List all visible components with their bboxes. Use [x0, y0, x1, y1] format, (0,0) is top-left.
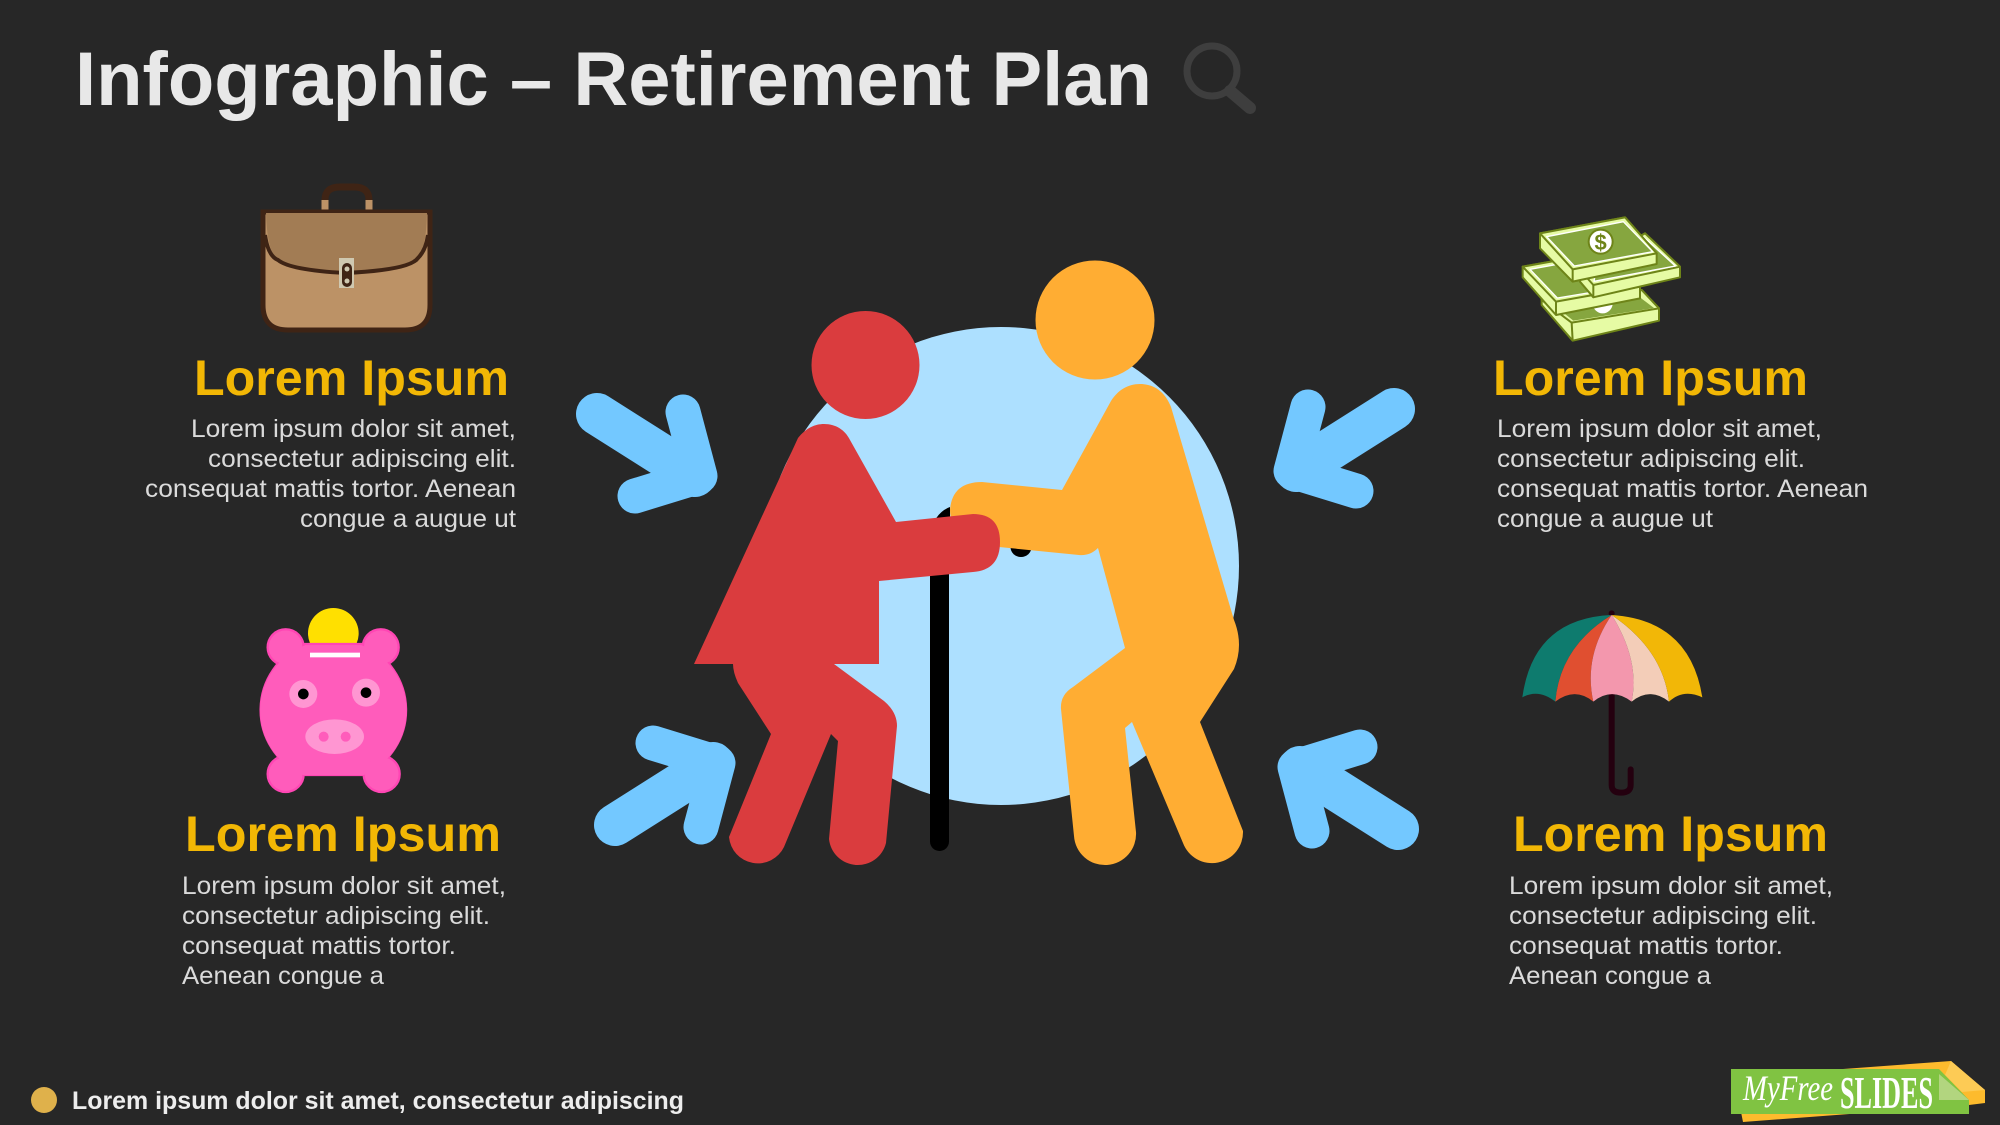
panel: top left [145, 187, 516, 533]
heading: Lorem Ipsum [1493, 350, 1808, 406]
text block [145, 415, 516, 533]
light blue circle [763, 327, 1239, 805]
logo: MyFreeSlides [1731, 1061, 1985, 1122]
text block: consequat mattis tortor. Aenean [1497, 475, 1868, 503]
red figure [694, 311, 1000, 865]
text block: consequat mattis tortor. [1509, 932, 1783, 960]
text block: Aenean congue a [1509, 962, 1711, 990]
orange figure [950, 260, 1243, 865]
walking cane [930, 507, 1032, 851]
icon: magnifying glass [1187, 46, 1250, 108]
arrow: top right [1291, 407, 1394, 491]
footer bullet [31, 1087, 57, 1113]
text block: consectetur adipiscing elit. [182, 902, 490, 930]
panel: top right [1493, 217, 1868, 533]
logo: MyFreeSlides: SLIDES [1840, 1067, 1933, 1118]
footer text: Lorem ipsum dolor sit amet, consectetur adipiscing [72, 1087, 684, 1115]
heading: Lorem Ipsum [185, 806, 501, 862]
text block: congue a augue ut [300, 505, 516, 533]
text block: Aenean congue a [182, 962, 384, 990]
text block [182, 872, 506, 990]
icon: piggy bank [260, 608, 407, 792]
arrow: top left [597, 412, 700, 496]
heading: Lorem Ipsum [1513, 806, 1828, 862]
arrow: bottom right [1295, 747, 1398, 831]
text block: consectetur adipiscing elit. [1497, 445, 1805, 473]
heading: Lorem Ipsum [194, 350, 509, 406]
text block: Lorem ipsum dolor sit amet, [1497, 415, 1822, 443]
text block: consectetur adipiscing elit. [1509, 902, 1817, 930]
text block [1509, 872, 1833, 990]
text block: congue a augue ut [1497, 505, 1713, 533]
panel: bottom left [182, 608, 506, 990]
text block: Lorem ipsum dolor sit amet, [191, 415, 516, 443]
text block: consectetur adipiscing elit. [208, 445, 516, 473]
text block: Lorem ipsum dolor sit amet, [182, 872, 506, 900]
panel: bottom right [1509, 610, 1833, 990]
text block: Lorem ipsum dolor sit amet, [1509, 872, 1833, 900]
title: Infographic – Retirement Plan [75, 37, 1152, 122]
icon: umbrella [1522, 610, 1702, 793]
text block: consequat mattis tortor. Aenean [145, 475, 516, 503]
icon: stacks of money: $ [1595, 230, 1607, 255]
icon: briefcase [263, 187, 430, 330]
logo: MyFreeSlides: MyFree [1742, 1068, 1833, 1108]
icon: stacks of money [1523, 217, 1680, 341]
text block [1497, 415, 1868, 533]
arrow: bottom left [615, 743, 718, 827]
central illustration: two elderly figures [694, 260, 1243, 865]
text block: consequat mattis tortor. [182, 932, 456, 960]
